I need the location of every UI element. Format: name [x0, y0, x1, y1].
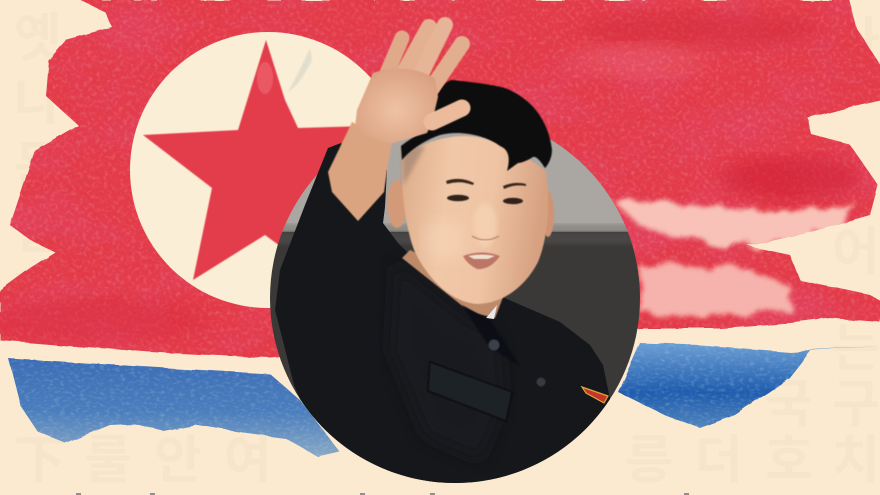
- flag white circle: [130, 32, 406, 308]
- palm: [355, 69, 438, 144]
- red watercolor field: [0, 0, 880, 360]
- neck: [402, 250, 505, 318]
- flag red star: [143, 40, 400, 290]
- faint Hangul background text: 룰: [84, 432, 132, 490]
- eyes: [447, 195, 469, 201]
- right ear: [542, 191, 554, 237]
- cheek highlight: [423, 218, 467, 262]
- man figure: [275, 25, 610, 483]
- raised forearm: [328, 122, 392, 221]
- nose: [473, 203, 497, 247]
- faint Hangul background text: 국: [765, 376, 813, 434]
- hand: [355, 25, 462, 144]
- faint Hangul background text: 말: [14, 202, 62, 260]
- jacket front highlight: [390, 262, 505, 460]
- faint Hangul background text: 문: [14, 138, 62, 196]
- thumb: [432, 108, 462, 122]
- faint Hangul background text: 릉: [625, 432, 673, 490]
- pale wash lower right: [640, 262, 790, 316]
- left ear: [387, 180, 407, 228]
- cropped text line at bottom edge: [76, 493, 689, 495]
- mouth: [463, 252, 500, 269]
- brows: [446, 179, 474, 185]
- shirt collar: [486, 305, 497, 319]
- portrait circle backdrop: [270, 110, 640, 492]
- jacket: [275, 143, 610, 483]
- faint Hangul background text: 下: [14, 432, 66, 490]
- faint Hangul background text: 사: [832, 14, 880, 72]
- faint Hangul background text: 호: [765, 432, 813, 490]
- face: [402, 136, 548, 304]
- faint Hangul background text: 더: [695, 432, 743, 490]
- jacket lapel: [462, 305, 520, 366]
- faint Hangul background text: 어: [832, 224, 880, 282]
- blue watercolor field: [8, 342, 876, 457]
- faint Hangul background text: 구: [832, 376, 880, 434]
- pocket flap: [428, 362, 512, 421]
- shaved sides: [402, 146, 425, 186]
- jacket buttons: [488, 340, 500, 350]
- faint Hangul background text: 나: [14, 74, 62, 132]
- faint Hangul background text: 옛: [14, 10, 62, 68]
- watercolor smudge in circle: [288, 48, 312, 92]
- darker paint pools: [720, 156, 860, 200]
- fingers: [384, 38, 402, 80]
- lapel badge: [582, 387, 608, 403]
- hair: [401, 80, 552, 171]
- faint Hangul background text: 한: [14, 266, 62, 324]
- faint Hangul background text: 치: [832, 432, 880, 490]
- faint Hangul background text: 는: [832, 320, 880, 378]
- faint Hangul background text: 여: [224, 432, 272, 490]
- faint Hangul background text: 안: [154, 432, 202, 490]
